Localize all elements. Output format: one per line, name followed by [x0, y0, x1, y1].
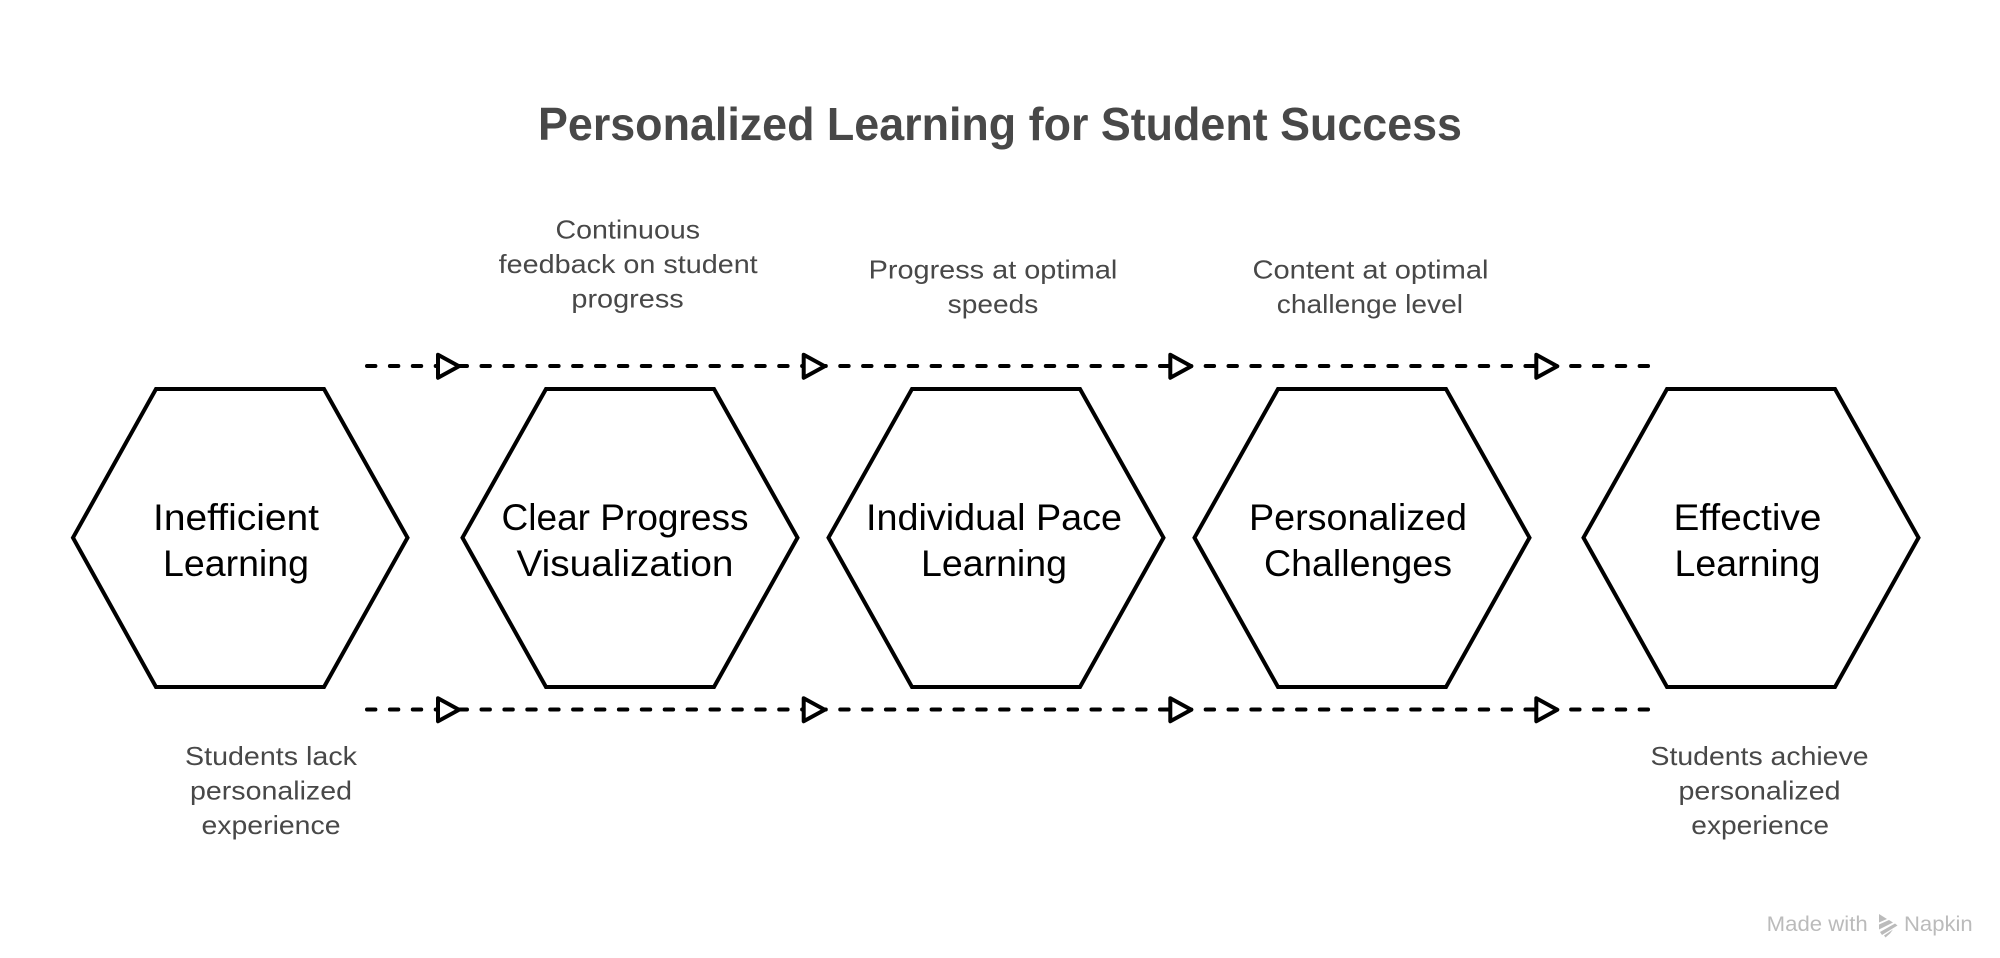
hexagon: Personalized Challenges [1194, 389, 1530, 687]
hexagon: Personalized Challenges: Personalized [1249, 497, 1467, 538]
watermark: Made with Napkin: Made with [1767, 913, 1868, 936]
annotation: students lack: Students lack [185, 741, 358, 771]
hexagon: Individual Pace Learning: Learning [921, 543, 1067, 584]
annotation: students lack: experience [202, 810, 340, 840]
annotation: continuous feedback [499, 214, 759, 314]
annotation: continuous feedback: feedback on student [499, 249, 759, 279]
hexagon: Clear Progress Visualization [462, 389, 798, 687]
hexagon: Effective Learning [1584, 389, 1918, 687]
hexagon: Clear Progress Visualization: Visualization [516, 543, 734, 584]
hexagon: Individual Pace Learning: Individual Pace [866, 497, 1122, 538]
annotation: optimal challenge [1252, 254, 1488, 319]
annotation: students achieve [1650, 741, 1868, 840]
annotation: optimal challenge: Content at optimal [1252, 254, 1488, 284]
hexagon: Effective Learning: Effective [1674, 497, 1822, 538]
hexagon: Effective Learning: Learning [1674, 543, 1820, 584]
annotation: students lack: personalized [190, 776, 352, 806]
annotation: optimal challenge: challenge level [1277, 289, 1463, 319]
hexagon: Clear Progress Visualization: Clear Progress [502, 497, 748, 538]
annotation: optimal speeds [869, 254, 1117, 319]
hexagon: Individual Pace Learning [828, 389, 1164, 687]
hexagon: Inefficient Learning: Inefficient [153, 497, 320, 538]
annotation: continuous feedback: Continuous [556, 214, 700, 244]
hexagon: Inefficient Learning [73, 389, 408, 687]
annotation: optimal speeds: Progress at optimal [869, 254, 1117, 284]
annotation: optimal speeds: speeds [948, 289, 1038, 319]
annotation: continuous feedback: progress [571, 284, 684, 314]
title: Personalized Learning for Student Success [538, 98, 1462, 150]
icon: Napkin logo [1879, 914, 1898, 938]
annotation: students achieve: Students achieve [1650, 741, 1868, 771]
watermark: Made with Napkin: Napkin [1904, 913, 1973, 936]
hexagon: Inefficient Learning: Learning [163, 543, 309, 584]
top dashed arrow line [367, 355, 1648, 378]
bottom dashed arrow line [367, 698, 1648, 721]
annotation: students lack [185, 741, 358, 840]
watermark: Made with Napkin [1767, 913, 1973, 938]
hexagon: Personalized Challenges: Challenges [1264, 543, 1452, 584]
annotation: students achieve: experience [1691, 810, 1829, 840]
annotation: students achieve: personalized [1678, 776, 1840, 806]
